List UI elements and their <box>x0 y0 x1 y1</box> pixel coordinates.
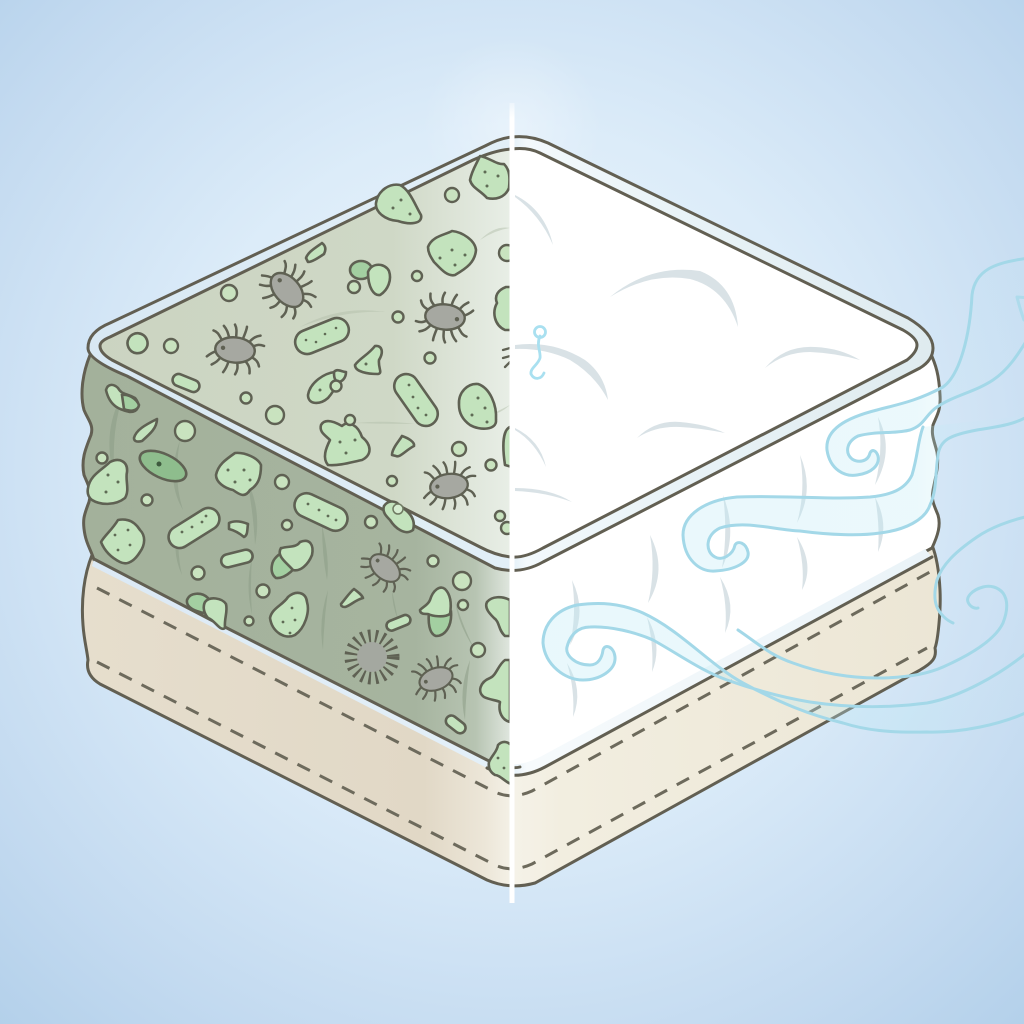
swirl: strand at far right <box>935 516 1024 623</box>
fibres on clean foam side <box>567 417 886 717</box>
foam layer: contaminated left, clean right <box>82 300 940 767</box>
swirl: upper air current <box>827 258 1024 475</box>
lower rim band <box>92 549 932 775</box>
ring at top of hook fibre <box>534 326 546 338</box>
airflow swirls <box>543 258 1024 732</box>
hook-shaped fibre on clean top <box>531 336 544 378</box>
panel: mattress illustration <box>82 137 940 886</box>
base layer: beige cushion <box>82 545 940 886</box>
swirl: small tip at top right <box>1017 297 1024 320</box>
swirl: strand curling right <box>738 586 1007 678</box>
central dividing line <box>510 103 514 903</box>
top surface spores and mould <box>128 156 515 534</box>
fibres on contaminated foam side <box>109 390 475 720</box>
swirl: lower air current <box>543 604 1024 732</box>
top surface inner panel <box>100 148 917 557</box>
furry dust mite <box>351 636 393 678</box>
contamination: mould, bacteria and mites <box>88 156 515 784</box>
soft glow behind divider top <box>422 35 602 215</box>
top surface rim <box>88 137 933 570</box>
mite group on foam side <box>351 536 466 707</box>
tufts on clean top surface <box>515 195 860 502</box>
mite group on top surface <box>205 253 510 513</box>
swirl: middle air current <box>683 415 1024 571</box>
foam side spores and mould <box>88 385 511 784</box>
faint tufts on contaminated top surface <box>300 228 510 424</box>
